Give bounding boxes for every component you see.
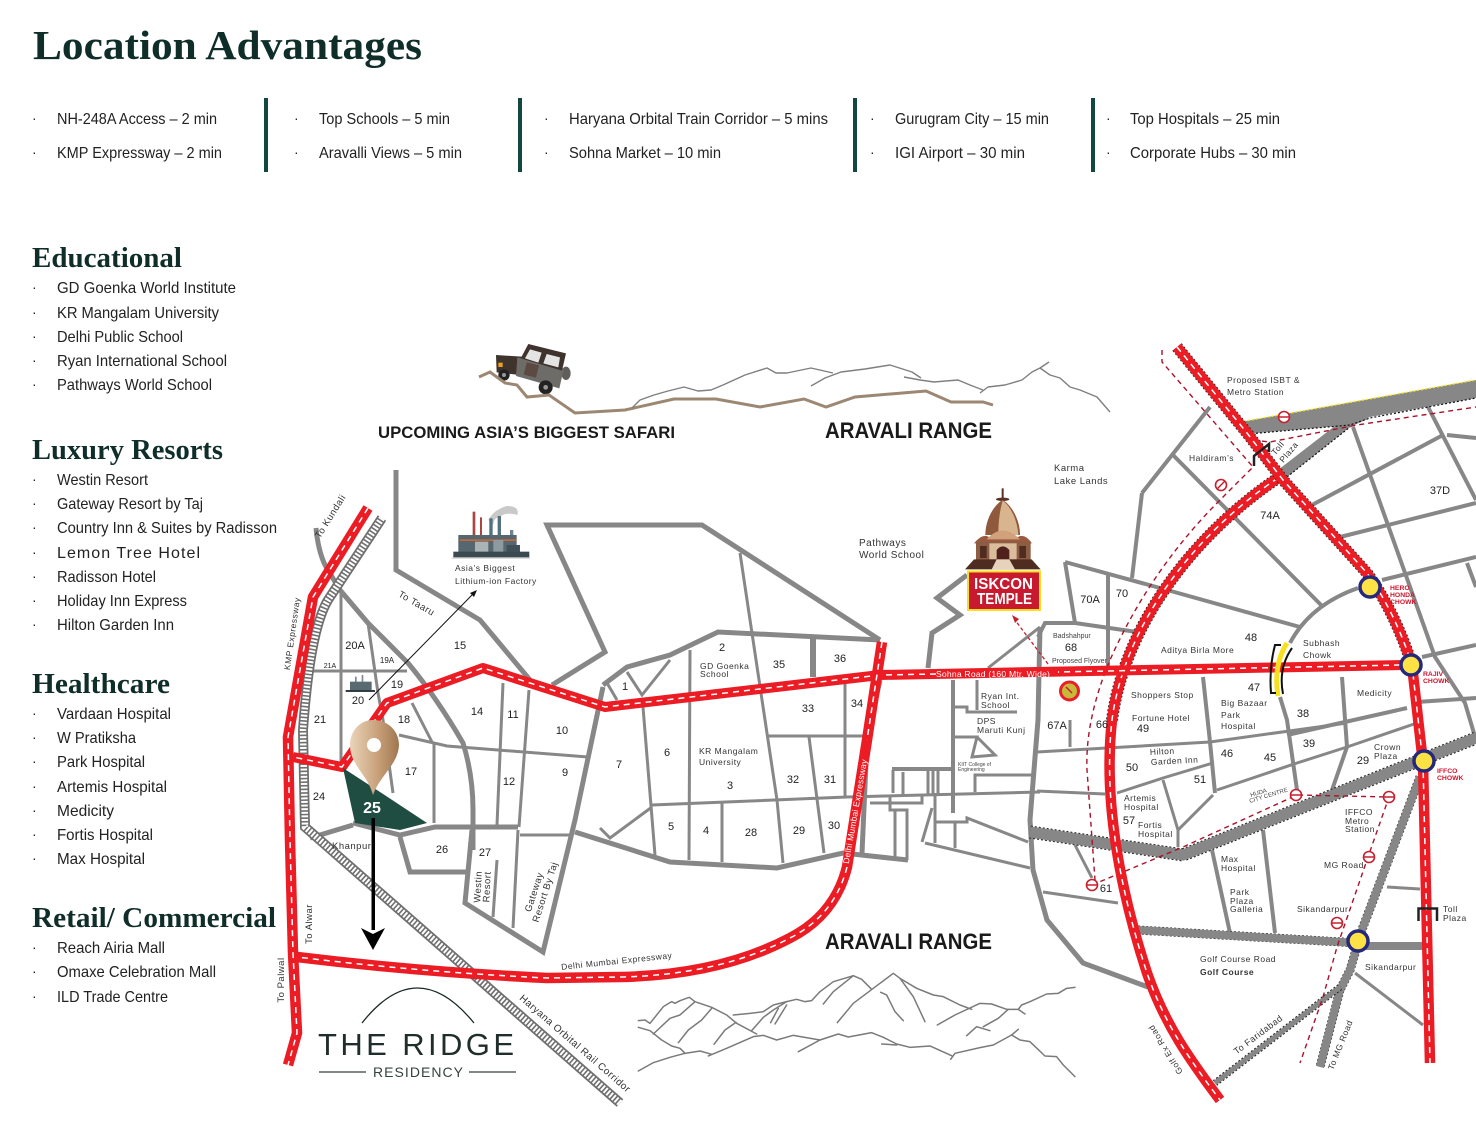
panel: educational: Pathways World School bbox=[57, 377, 212, 394]
labels: east map places: MG Road bbox=[1324, 860, 1364, 870]
labels: sector numbers west: 26 bbox=[436, 844, 448, 856]
labels: east map places: Shoppers Stop bbox=[1131, 690, 1194, 700]
icon: proposed flyover marker bbox=[1060, 682, 1078, 700]
labels: east map places: Galleria bbox=[1230, 904, 1263, 914]
column 3: Sohna Market – 10 min bbox=[569, 145, 721, 162]
labels: central map places: World School bbox=[859, 550, 924, 561]
labels: chowk names: CHOWK bbox=[1437, 775, 1464, 782]
panel: educational: · bbox=[32, 376, 37, 392]
arrow: to iskcon temple bbox=[1012, 615, 1048, 664]
illustration: safari jeep bbox=[496, 344, 571, 394]
icons: chowk interchanges bbox=[1348, 577, 1434, 951]
panel: healthcare bbox=[32, 669, 171, 868]
roads: thick highways bbox=[1030, 380, 1476, 1083]
labels: sector numbers west: 18 bbox=[398, 714, 410, 726]
labels: sector numbers west: 21 bbox=[314, 714, 326, 726]
labels: sector numbers central: 6 bbox=[664, 747, 670, 759]
labels: east map places: Fortune Hotel bbox=[1132, 713, 1190, 723]
road: southern peripheral ring bbox=[1110, 478, 1278, 1100]
column 2: · bbox=[294, 110, 299, 126]
labels: west map places: Delhi Mumbai Expressway bbox=[561, 950, 673, 972]
labels: sector numbers central: 33 bbox=[802, 703, 814, 715]
labels: sector numbers west: 20A bbox=[345, 640, 365, 652]
panel: educational: · bbox=[32, 328, 37, 344]
map: metro line bbox=[1087, 350, 1476, 1063]
labels: central map places: University bbox=[699, 757, 742, 767]
panel: luxury resorts: · bbox=[32, 616, 37, 632]
labels: sector numbers central: 4 bbox=[703, 825, 709, 837]
panel: luxury resorts: Country Inn & Suites by Radisson bbox=[57, 520, 277, 537]
icon: top toll plaza bbox=[1254, 444, 1269, 466]
road: nh-48 corridor bbox=[1177, 347, 1430, 1063]
illustration: mountains south bbox=[638, 973, 1075, 1077]
labels: sector numbers central: 36 bbox=[834, 653, 846, 665]
map: haryana orbital rail corridor bbox=[303, 518, 620, 1103]
panel: healthcare: Fortis Hospital bbox=[57, 827, 153, 844]
labels: sector numbers west: 21A bbox=[324, 663, 337, 670]
labels: central map places: DPS bbox=[977, 716, 996, 726]
labels: sector numbers central: 34 bbox=[851, 698, 863, 710]
panel: luxury resorts: · bbox=[32, 495, 37, 511]
labels: central map places: Maruti Kunj bbox=[977, 725, 1026, 735]
panel: luxury resorts: Lemon Tree Hotel bbox=[57, 545, 200, 562]
labels: sector numbers east: 67A bbox=[1047, 720, 1067, 732]
labels: sector numbers east: 61 bbox=[1100, 883, 1112, 895]
labels: sector numbers central: 31 bbox=[824, 774, 836, 786]
labels: sector numbers east: 39 bbox=[1303, 738, 1315, 750]
labels: west map places: Resort By Taj bbox=[531, 861, 561, 924]
icon: south toll plaza bbox=[1418, 908, 1437, 921]
labels: sector numbers west bbox=[313, 640, 622, 859]
panel: healthcare: · bbox=[32, 705, 37, 721]
labels: east map places bbox=[1124, 375, 1467, 1076]
labels: sector numbers central: 29 bbox=[793, 825, 805, 837]
arrow: down to the ridge bbox=[361, 818, 385, 950]
labels: central map places: KIIT College of bbox=[958, 762, 992, 768]
labels: east map places: Plaza bbox=[1374, 751, 1398, 761]
labels: east map places: Toll bbox=[1269, 439, 1286, 457]
labels: sector numbers east: 48 bbox=[1245, 632, 1257, 644]
labels: sector numbers east: 47 bbox=[1248, 682, 1260, 694]
labels: east map places: Chowk bbox=[1303, 650, 1332, 660]
illustration: lithium factory bbox=[452, 506, 530, 559]
panel: healthcare: Healthcare bbox=[32, 669, 170, 700]
labels: west map places: To Palwal bbox=[276, 957, 287, 1003]
panel: retail and commercial bbox=[32, 903, 276, 1006]
labels: chowk names: HONDA bbox=[1390, 592, 1415, 599]
labels: east map places: IFFCO bbox=[1345, 807, 1373, 817]
labels: east map places: Aditya Birla More bbox=[1161, 645, 1234, 655]
labels: east map places: Sikandarpur bbox=[1365, 962, 1416, 972]
labels: sector numbers east: 49 bbox=[1137, 723, 1149, 735]
column 2: Aravalli Views – 5 min bbox=[319, 145, 462, 162]
labels: east map places: Plaza bbox=[1443, 913, 1467, 923]
labels: central map places: Pathways bbox=[859, 538, 906, 549]
labels: west map places: Gateway bbox=[523, 871, 546, 913]
panel: educational: · bbox=[32, 304, 37, 320]
labels: sector numbers east: 70 bbox=[1116, 588, 1128, 600]
labels: sector numbers central: 32 bbox=[787, 774, 799, 786]
labels: sector numbers central: 28 bbox=[745, 827, 757, 839]
label: aravali range north: ARAVALI RANGE bbox=[825, 418, 992, 443]
labels: sector numbers west: 17 bbox=[405, 766, 417, 778]
labels: west map places: To Taaru bbox=[396, 589, 436, 619]
illustration: aravali ridge outline bbox=[632, 362, 1110, 412]
column 5: Corporate Hubs – 30 min bbox=[1130, 145, 1296, 162]
column 1: KMP Expressway – 2 min bbox=[57, 145, 222, 162]
labels: sector numbers west: 15 bbox=[454, 640, 466, 652]
labels: central map places: Lake Lands bbox=[1054, 476, 1108, 487]
column 2: Top Schools – 5 min bbox=[319, 111, 450, 128]
labels: sector numbers west: 12 bbox=[503, 776, 515, 788]
column 3: · bbox=[544, 144, 549, 160]
panel: educational: Delhi Public School bbox=[57, 329, 183, 346]
labels: west map places: Khanpur bbox=[332, 841, 371, 852]
labels: east map places: Plaza bbox=[1230, 896, 1254, 906]
labels: sector numbers west: 7 bbox=[616, 759, 622, 771]
labels: sector numbers east: 66 bbox=[1096, 719, 1108, 731]
labels: east map places: Metro Station bbox=[1227, 387, 1284, 397]
panel: retail and commercial: Omaxe Celebration Mall bbox=[57, 964, 216, 981]
labels: sector numbers central: 5 bbox=[668, 821, 674, 833]
panel: luxury resorts: Radisson Hotel bbox=[57, 569, 156, 586]
labels: east map places: Hospital bbox=[1221, 863, 1256, 873]
arrow: to lithium factory bbox=[369, 590, 477, 700]
labels: sector numbers west: 14 bbox=[471, 706, 483, 718]
panel: healthcare: W Pratiksha bbox=[57, 730, 136, 747]
labels: sector numbers east: 70A bbox=[1080, 594, 1100, 606]
labels: east map places: Max bbox=[1221, 854, 1239, 864]
labels: east map places: Fortis bbox=[1138, 820, 1162, 830]
roads: central sectors bbox=[600, 553, 1040, 868]
labels: west map places: KMP Expressway bbox=[282, 596, 302, 671]
labels: west map places: To Kundali bbox=[313, 493, 349, 541]
panel: healthcare: · bbox=[32, 850, 37, 866]
labels: east map places: HUDA bbox=[1250, 788, 1268, 799]
panel: healthcare: · bbox=[32, 778, 37, 794]
panel: luxury resorts bbox=[32, 435, 277, 634]
labels: sector numbers east: 38 bbox=[1297, 708, 1309, 720]
labels: east map places: CITY CENTRE bbox=[1249, 788, 1289, 805]
panel: luxury resorts: Luxury Resorts bbox=[32, 435, 223, 466]
panel: retail and commercial: ILD Trade Centre bbox=[57, 989, 168, 1006]
labels: east map places: Hospital bbox=[1221, 721, 1256, 731]
labels: east map places: Garden Inn bbox=[1151, 755, 1199, 767]
panel: luxury resorts: · bbox=[32, 519, 37, 535]
panel: healthcare: Vardaan Hospital bbox=[57, 706, 171, 723]
illustration: small factory bbox=[346, 675, 375, 692]
labels: east map places: Haldiram’s bbox=[1189, 453, 1234, 463]
labels: east map places: Sikandarpur bbox=[1297, 904, 1348, 914]
icon: subhash chowk flyover bbox=[1270, 643, 1292, 696]
column 5 bbox=[1106, 110, 1296, 162]
logo: the ridge residency: THE RIDGE bbox=[318, 1027, 514, 1062]
panel: educational: GD Goenka World Institute bbox=[57, 280, 236, 297]
labels: sector numbers east bbox=[1047, 485, 1450, 895]
column 5: · bbox=[1106, 144, 1111, 160]
column 4: · bbox=[870, 144, 875, 160]
labels: sector numbers east: 68 bbox=[1065, 642, 1077, 654]
plot: sector 25 bbox=[343, 768, 427, 830]
labels: west map places: Resort bbox=[481, 871, 494, 903]
labels: sector numbers east: 45 bbox=[1264, 752, 1276, 764]
labels: central map places: School bbox=[700, 669, 729, 679]
top strip: travel times bbox=[32, 98, 1296, 172]
column 2 bbox=[294, 110, 462, 162]
labels: east map places: Hospital bbox=[1138, 829, 1173, 839]
labels: east map places: Toll bbox=[1443, 904, 1458, 914]
labels: sector numbers east: 57 bbox=[1123, 815, 1135, 827]
labels: east map places: Golf Course bbox=[1200, 967, 1254, 977]
column 4: IGI Airport – 30 min bbox=[895, 145, 1025, 162]
labels: east map places: Station bbox=[1345, 824, 1375, 834]
labels: east map places: Medicity bbox=[1357, 688, 1392, 698]
panel: educational: KR Mangalam University bbox=[57, 305, 219, 322]
panel: luxury resorts: · bbox=[32, 544, 37, 560]
label: sector 25: 25 bbox=[363, 800, 381, 817]
labels: central map places: KR Mangalam bbox=[699, 746, 758, 756]
labels: sector numbers east: 37D bbox=[1430, 485, 1450, 497]
panel: luxury resorts: Gateway Resort by Taj bbox=[57, 496, 203, 513]
labels: east map places: To MG Road bbox=[1326, 1019, 1355, 1071]
roads: west sectors bbox=[308, 470, 908, 952]
logo: the ridge residency bbox=[318, 988, 516, 1080]
illustration: safari trail bbox=[479, 372, 993, 413]
labels: sector numbers central: 3 bbox=[727, 780, 733, 792]
labels: west map places: Haryana Orbital Rail Corridor bbox=[517, 993, 632, 1095]
labels: east map places: Proposed ISBT & bbox=[1227, 375, 1300, 385]
panel: healthcare: · bbox=[32, 802, 37, 818]
labels: central map places: Karma bbox=[1054, 463, 1085, 474]
labels: chowk names: HERO bbox=[1390, 585, 1410, 592]
column 1: · bbox=[32, 144, 37, 160]
column 1: · bbox=[32, 110, 37, 126]
labels: chowk names: RAJIV bbox=[1423, 671, 1443, 678]
labels: east map places: Metro bbox=[1345, 816, 1369, 826]
panel: educational bbox=[32, 243, 236, 394]
labels: central map places: Proposed Flyover bbox=[1052, 658, 1108, 665]
labels: central map places: School bbox=[981, 700, 1010, 710]
labels: chowk names bbox=[1390, 585, 1464, 782]
labels: sector numbers west: 9 bbox=[562, 767, 568, 779]
labels: central map places: Sohna Road (160 Mtr. Wide) bbox=[936, 669, 1050, 679]
labels: chowk names: CHOWK bbox=[1423, 678, 1450, 685]
labels: east map places: Park bbox=[1221, 710, 1241, 720]
labels: east map places: Plaza bbox=[1277, 440, 1300, 464]
panel: educational: Ryan International School bbox=[57, 353, 227, 370]
labels: sector numbers east: 51 bbox=[1194, 774, 1206, 786]
labels: sector numbers central bbox=[622, 642, 863, 839]
labels: sector numbers west: 27 bbox=[479, 847, 491, 859]
labels: sector numbers east: 29 bbox=[1357, 755, 1369, 767]
labels: west map places: Westin bbox=[472, 871, 485, 903]
labels: central map places: Engineering bbox=[958, 767, 985, 773]
panel: healthcare: · bbox=[32, 729, 37, 745]
column 4: · bbox=[870, 110, 875, 126]
labels: sector numbers west: 19A bbox=[380, 656, 395, 665]
labels: west map places: Lithium-ion Factory bbox=[455, 576, 537, 586]
iskcon temple label: TEMPLE bbox=[977, 591, 1032, 608]
panel: retail and commercial: · bbox=[32, 988, 37, 1004]
title: Location Advantages bbox=[33, 22, 422, 68]
panel: retail and commercial: · bbox=[32, 939, 37, 955]
labels: east map places: Hospital bbox=[1124, 802, 1159, 812]
column 3: Haryana Orbital Train Corridor – 5 mins bbox=[569, 111, 828, 128]
labels: east map places: Golf Ex Road bbox=[1146, 1023, 1185, 1076]
labels: east map places: Golf Course Road bbox=[1200, 954, 1276, 964]
illustration: iskcon temple bbox=[965, 488, 1041, 569]
labels: central map places bbox=[699, 463, 1108, 864]
labels: east map places: Park bbox=[1230, 887, 1250, 897]
panel: healthcare: Max Hospital bbox=[57, 851, 145, 868]
labels: central map places: Badshahpur bbox=[1053, 633, 1091, 640]
panel: educational: · bbox=[32, 352, 37, 368]
panel: educational: · bbox=[32, 279, 37, 295]
road: sohna road bbox=[293, 665, 1405, 767]
labels: sector numbers east: 74A bbox=[1260, 510, 1280, 522]
labels: east map places: Hilton bbox=[1150, 746, 1175, 757]
label: upcoming safari: UPCOMING ASIA’S BIGGEST SAFARI bbox=[378, 423, 675, 442]
labels: sector numbers west: 20 bbox=[352, 695, 364, 707]
panel: educational: Educational bbox=[32, 243, 182, 274]
labels: west map places: To Alwar bbox=[304, 904, 315, 944]
panel: healthcare: · bbox=[32, 826, 37, 842]
labels: chowk names: CHOWK bbox=[1390, 599, 1417, 606]
column 4 bbox=[870, 110, 1049, 162]
labels: sector numbers central: 1 bbox=[622, 681, 628, 693]
labels: sector numbers west: 10 bbox=[556, 725, 568, 737]
labels: sector numbers central: 2 bbox=[719, 642, 725, 654]
column 1: NH-248A Access – 2 min bbox=[57, 111, 217, 128]
label: aravali range south: ARAVALI RANGE bbox=[825, 929, 992, 954]
labels: east map places: To Faridabad bbox=[1232, 1013, 1285, 1056]
road: delhi mumbai expressway bbox=[297, 642, 882, 978]
panel: luxury resorts: Hilton Garden Inn bbox=[57, 617, 174, 634]
labels: west map places: Asia’s Biggest bbox=[455, 563, 515, 573]
icons: metro stations bbox=[1086, 412, 1394, 928]
labels: central map places: Ryan Int. bbox=[981, 691, 1020, 701]
labels: sector numbers west: 24 bbox=[313, 791, 325, 803]
panel: healthcare: Artemis Hospital bbox=[57, 779, 167, 796]
column 5: Top Hospitals – 25 min bbox=[1130, 111, 1280, 128]
labels: chowk names: IFFCO bbox=[1437, 768, 1457, 775]
panel: healthcare: · bbox=[32, 753, 37, 769]
labels: central map places: Delhi Mumbai Expressway bbox=[841, 758, 869, 864]
road: kmp expressway bbox=[288, 508, 368, 1065]
roads: east grid bbox=[1030, 405, 1476, 1025]
labels: west map places bbox=[276, 493, 673, 1095]
column 5: · bbox=[1106, 110, 1111, 126]
panel: retail and commercial: Reach Airia Mall bbox=[57, 940, 165, 957]
map: grey road network bbox=[308, 380, 1476, 1083]
labels: east map places: Subhash bbox=[1303, 638, 1340, 648]
column 2: · bbox=[294, 144, 299, 160]
column 3 bbox=[544, 110, 828, 162]
labels: east map places: Big Bazaar bbox=[1221, 698, 1268, 708]
map pin bbox=[350, 720, 399, 795]
labels: east map places: Crown bbox=[1374, 742, 1401, 752]
labels: east map places: Artemis bbox=[1124, 793, 1156, 803]
labels: sector numbers central: 30 bbox=[828, 820, 840, 832]
panel: healthcare: Medicity bbox=[57, 803, 114, 820]
panel: luxury resorts: · bbox=[32, 568, 37, 584]
map: red expressways bbox=[288, 347, 1430, 1100]
labels: sector numbers west: 19 bbox=[391, 679, 403, 691]
panel: luxury resorts: Holiday Inn Express bbox=[57, 593, 187, 610]
column 4: Gurugram City – 15 min bbox=[895, 111, 1049, 128]
logo: the ridge residency: RESIDENCY bbox=[373, 1064, 464, 1080]
panel: luxury resorts: · bbox=[32, 471, 37, 487]
panel: retail and commercial: · bbox=[32, 963, 37, 979]
iskcon temple label bbox=[968, 572, 1040, 610]
labels: sector numbers east: 50 bbox=[1126, 762, 1138, 774]
panel: retail and commercial: Retail/ Commercial bbox=[32, 903, 276, 934]
labels: sector numbers central: 35 bbox=[773, 659, 785, 671]
column 3: · bbox=[544, 110, 549, 126]
labels: sector numbers east: 46 bbox=[1221, 748, 1233, 760]
column 1 bbox=[32, 110, 222, 162]
panel: healthcare: Park Hospital bbox=[57, 754, 145, 771]
iskcon temple label: ISKCON bbox=[974, 576, 1033, 593]
panel: luxury resorts: · bbox=[32, 592, 37, 608]
panel: luxury resorts: Westin Resort bbox=[57, 472, 148, 489]
labels: central map places: GD Goenka bbox=[700, 661, 749, 671]
labels: sector numbers west: 11 bbox=[507, 709, 519, 721]
